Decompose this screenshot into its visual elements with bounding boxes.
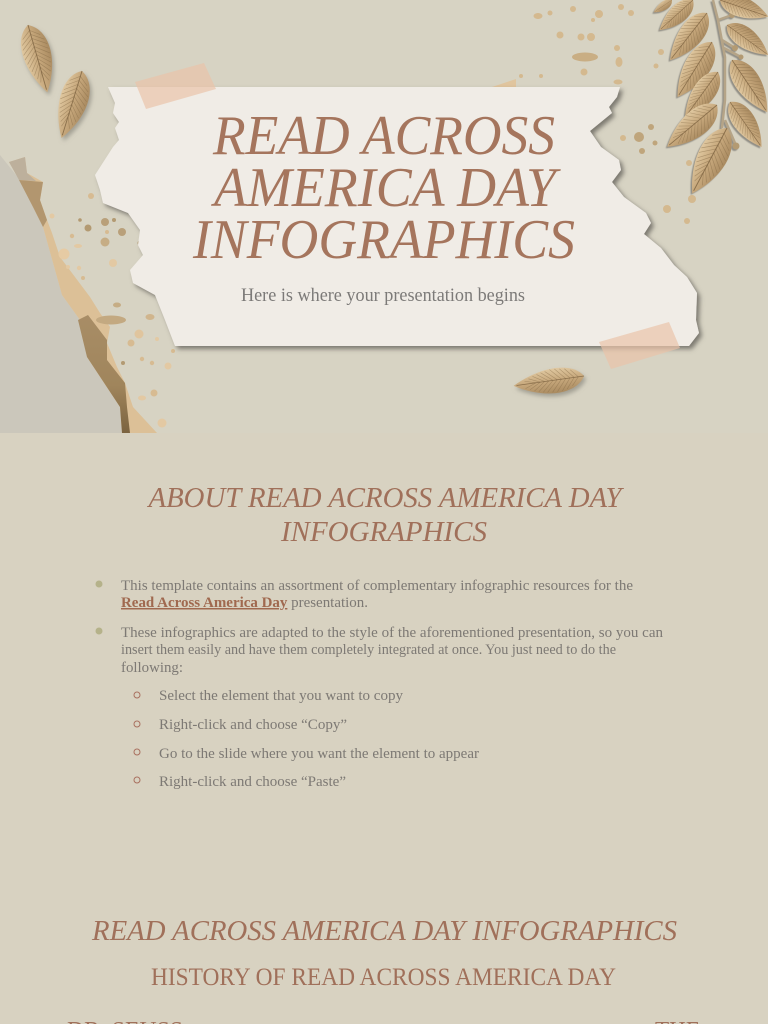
icon: leafy branch top right (651, 0, 768, 201)
icon: gold leaf upper left (15, 21, 61, 96)
heading: history: HISTORY OF READ ACROSS AMERICA DAY (151, 964, 616, 991)
title: INFOGRAPHICS (192, 209, 575, 271)
title: AMERICA DAY (210, 157, 562, 219)
heading: about (146, 483, 625, 548)
bullet one: Read Across America Day presentation. (121, 595, 368, 611)
heading: infographics: READ ACROSS AMERICA DAY INFOGRAPHICS (91, 916, 677, 947)
torn grey corner with gold edge (0, 155, 157, 433)
bullet one: This template contains an assortment of complementary infographic resources for the (121, 578, 633, 594)
bullet list (96, 578, 663, 790)
bullet two: following: (121, 660, 183, 676)
icon: gold leaf lower left (49, 67, 96, 142)
gold splatter right (492, 4, 696, 224)
icon: fallen gold leaf (512, 364, 586, 399)
heading: about: ABOUT READ ACROSS AMERICA DAY (146, 483, 625, 514)
sub bullets: Select the element that you want to copy (159, 688, 403, 704)
bullet one (96, 578, 633, 611)
gold splatter left (50, 193, 175, 428)
tape bottom (599, 322, 680, 369)
tape top (135, 63, 216, 109)
sub bullets: Right-click and choose “Copy” (159, 717, 347, 733)
heading: about: INFOGRAPHICS (280, 517, 487, 548)
subtitle: Here is where your presentation begins (241, 285, 525, 306)
bullet two: These infographics are adapted to the style of the aforementioned presentation, so you can (121, 625, 663, 641)
sub bullets: Right-click and choose “Paste” (159, 774, 346, 790)
cover image background (0, 0, 768, 433)
sub bullets: Go to the slide where you want the element to appear (159, 746, 479, 762)
torn paper panel (95, 87, 699, 346)
sub bullets (134, 688, 479, 790)
bullet two (96, 625, 663, 676)
title: READ ACROSS (212, 105, 555, 167)
bullet two: insert them easily and have them completely integrated at once. You just need to do the (121, 642, 616, 658)
title (192, 105, 575, 271)
